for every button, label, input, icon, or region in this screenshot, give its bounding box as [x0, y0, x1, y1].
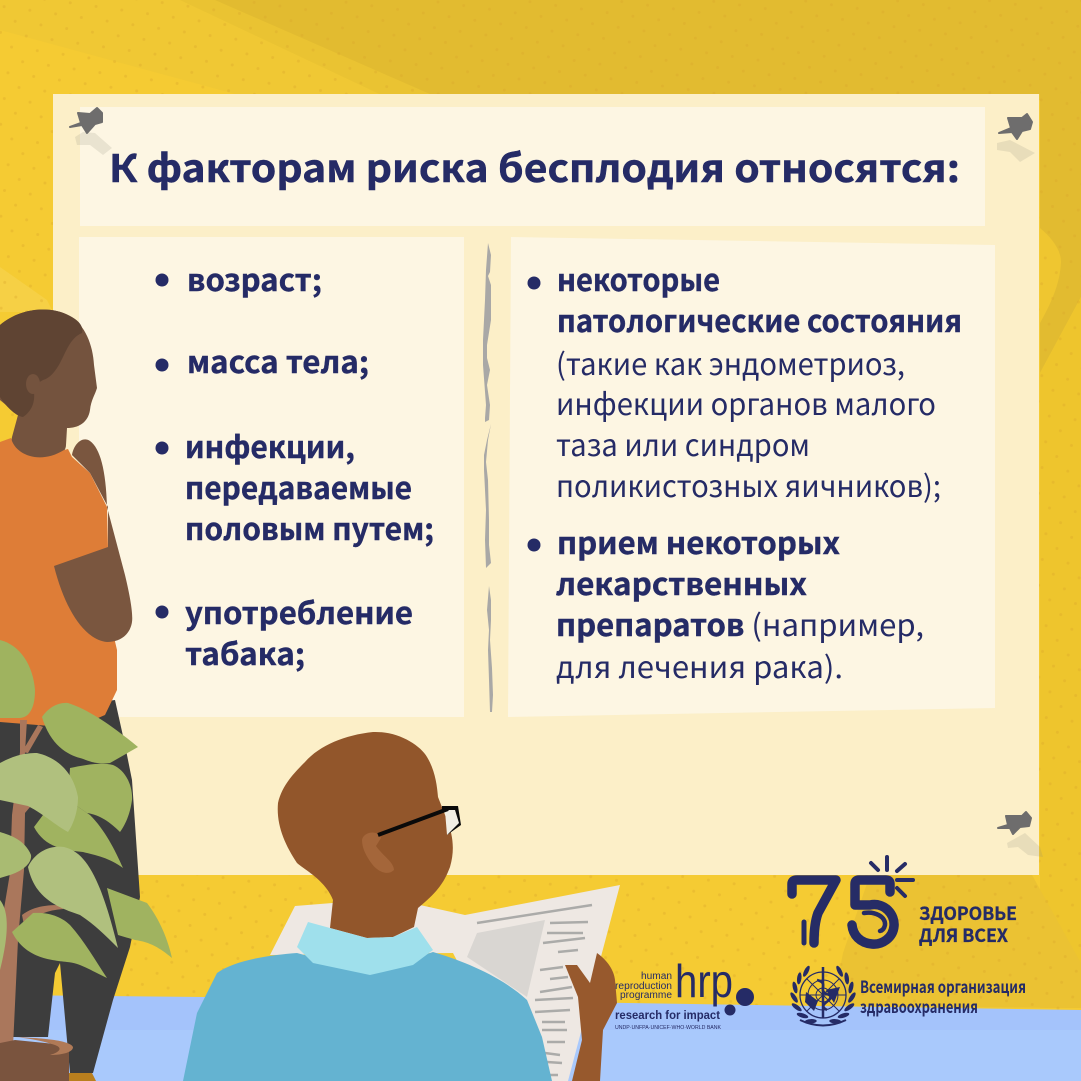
- logo: hrp: reproduction: [615, 981, 672, 992]
- standing person: [0, 310, 140, 1081]
- hand and forearm: [54, 439, 132, 642]
- logo: WHO: Всемирная организация: [860, 973, 1026, 998]
- logo: hrp: programme: [620, 990, 672, 1001]
- newspaper: [270, 885, 620, 1081]
- logo: hrp: research for impact: [615, 1008, 720, 1022]
- left list: употребление: [185, 589, 413, 633]
- right list: препаратов (например,: [556, 601, 924, 645]
- trousers: [0, 700, 140, 1073]
- logo: 75 years health for all: ЗДОРОВЬЕ: [919, 900, 1017, 926]
- sweater: [183, 952, 552, 1081]
- shirt: [0, 438, 117, 728]
- right list: для лечения рака).: [556, 643, 843, 687]
- left list: [156, 256, 434, 674]
- icon: pin bottom right: [998, 812, 1043, 857]
- head and neck: [0, 310, 97, 460]
- shoe: [69, 1073, 96, 1081]
- head: [278, 732, 453, 938]
- right list: [528, 256, 962, 687]
- title: К факторам риска бесплодия относятся:: [109, 138, 960, 193]
- logo: hrp: UNDP·UNFPA·UNICEF·WHO·WORLD BANK: [615, 1025, 722, 1031]
- right list: лекарственных: [556, 560, 807, 604]
- panel: left list: [79, 237, 464, 717]
- divider: [483, 243, 493, 712]
- panel: notice board: [53, 94, 1039, 875]
- stem: [0, 720, 65, 1048]
- collar: [297, 922, 433, 975]
- newspaper picture: [467, 920, 545, 997]
- seated reader: [183, 732, 620, 1081]
- ear: [26, 374, 40, 394]
- right list: инфекции органов малого: [556, 380, 936, 424]
- pot: [0, 1040, 69, 1081]
- left list: масса тела;: [187, 338, 369, 382]
- icon: pin top right: [997, 114, 1035, 162]
- newspaper text lines: [477, 905, 592, 1075]
- right list: поликистозных яичников);: [556, 462, 941, 506]
- logo: WHO: здравоохранения: [860, 993, 978, 1018]
- logo: 75 years health for all: ДЛЯ ВСЕХ: [919, 922, 1009, 948]
- right list: прием некоторых: [557, 519, 840, 563]
- left list: табака;: [185, 630, 305, 674]
- ear: [362, 832, 394, 873]
- left list: передаваемые: [185, 464, 412, 508]
- glasses: [378, 806, 461, 835]
- icon: pin top left: [70, 108, 112, 155]
- logo: WHO: [789, 965, 1026, 1026]
- right list: (такие как эндометриоз,: [556, 340, 905, 384]
- leaves: [0, 640, 35, 718]
- logo: 75 years health for all: [792, 857, 1017, 948]
- title panel: [80, 107, 985, 226]
- panel: right list: [508, 237, 995, 717]
- right list: патологические состояния: [557, 297, 962, 341]
- logo: hrp: human: [641, 971, 672, 982]
- emblem: [789, 965, 857, 1026]
- hand: [565, 953, 617, 1081]
- left list: половым путем;: [185, 505, 434, 549]
- right list: таза или синдром: [556, 421, 810, 465]
- logo: hrp: [615, 955, 754, 1031]
- hair: [0, 310, 82, 417]
- right list: некоторые: [557, 256, 720, 300]
- left list: возраст;: [187, 256, 322, 300]
- logo: hrp: hrp: [675, 955, 733, 1007]
- plant: [0, 640, 172, 1081]
- left list: инфекции,: [185, 423, 355, 467]
